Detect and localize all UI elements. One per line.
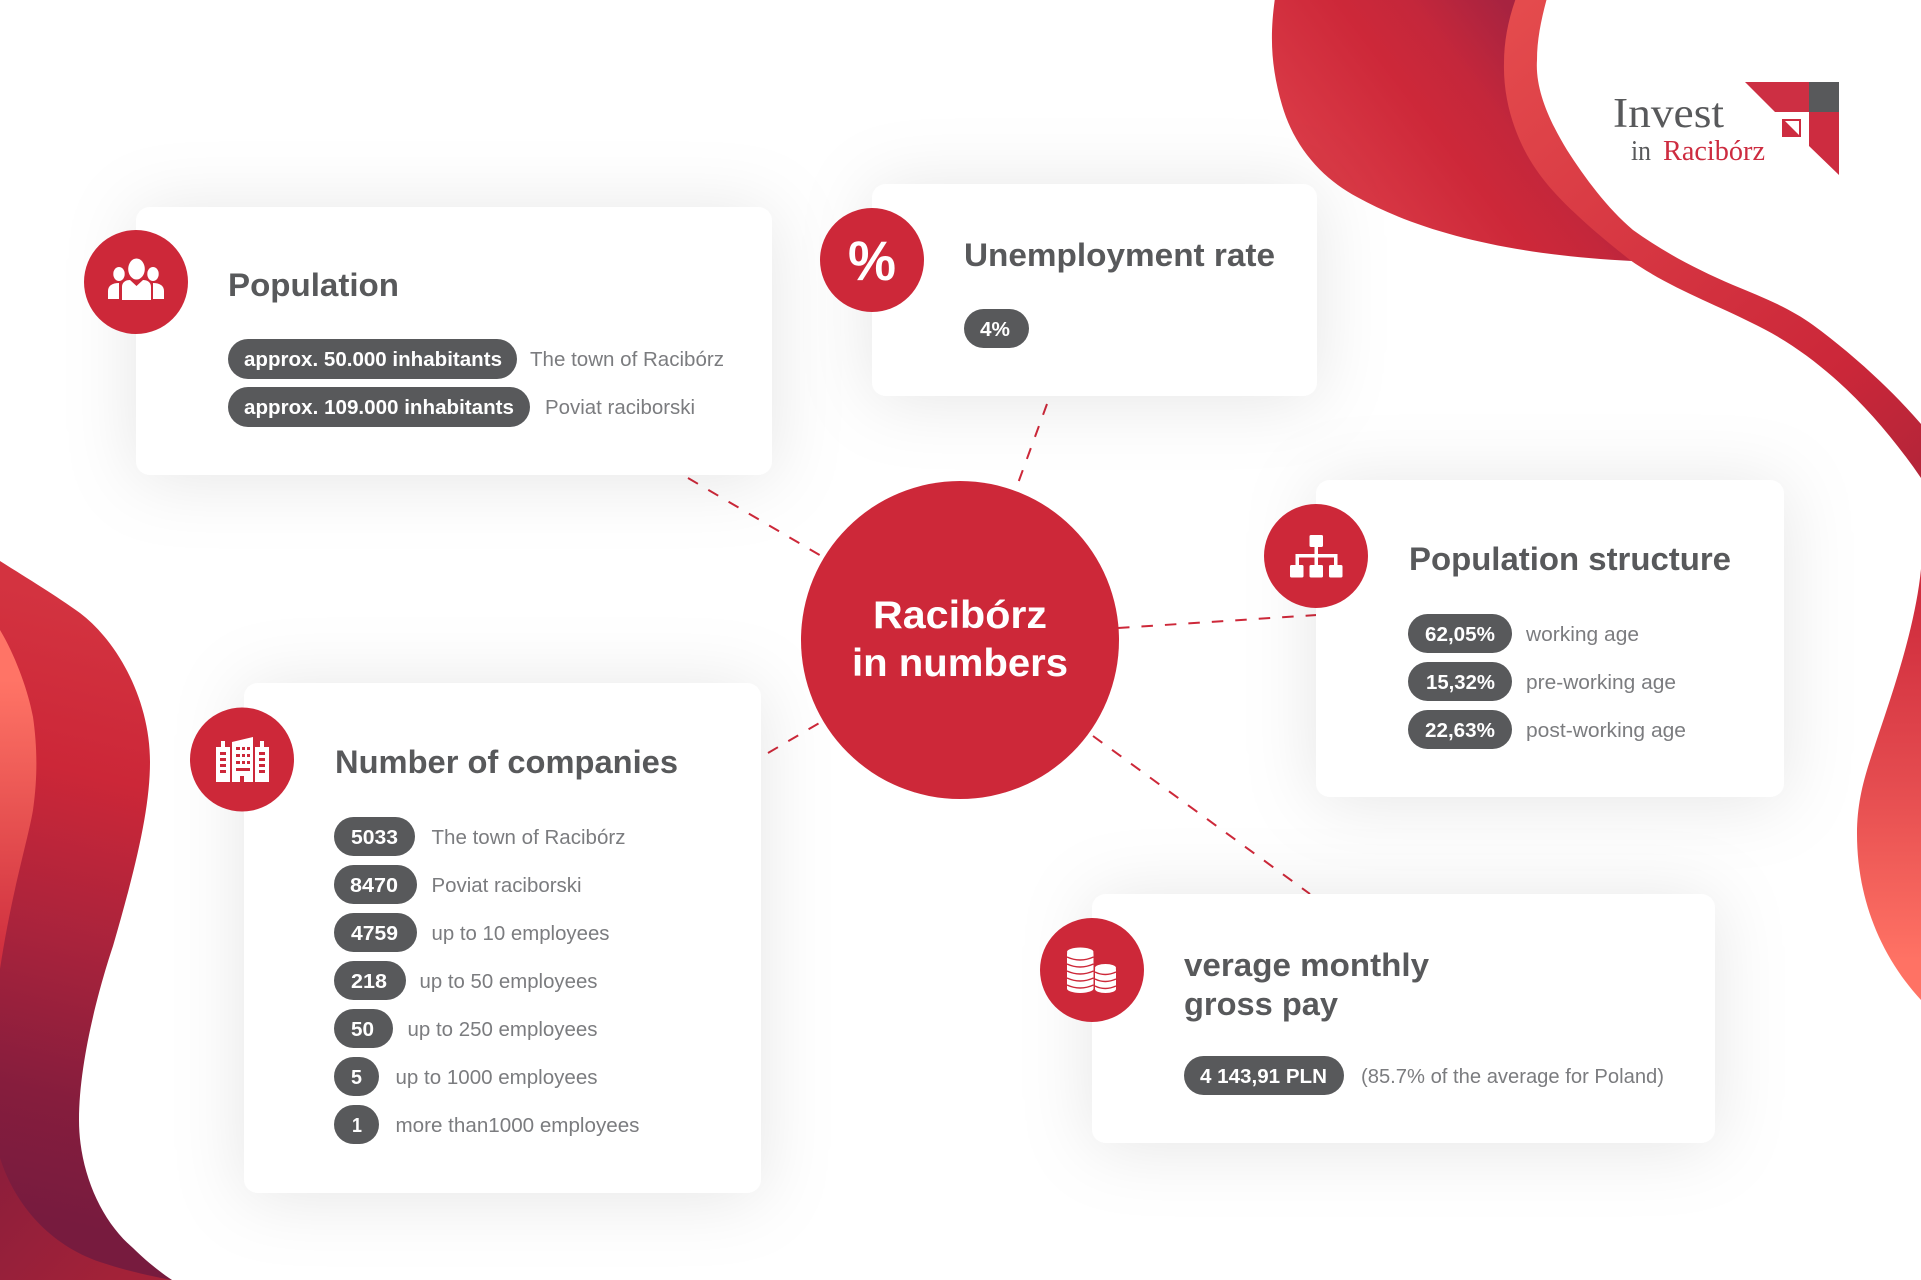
stat row: up to 250 (334, 1009, 598, 1048)
stat row: poviat: 8470 (350, 875, 398, 897)
central circle: Racibórz in numbers: Racibórz (873, 594, 1047, 637)
stat row: poviat: approx. 109.000 inhabitants (244, 397, 514, 419)
stat row: up to 1000: up to 1000 employees (396, 1067, 598, 1089)
stat row: town (334, 817, 626, 856)
panel: population (84, 207, 772, 475)
stat row: town: 5033 (351, 827, 398, 849)
icon: coins (1040, 918, 1144, 1022)
stat row: more than 1000: more than1000 employees (396, 1115, 640, 1137)
stat row: up to 10: up to 10 employees (432, 923, 610, 945)
card (1316, 480, 1784, 797)
stat row: up to 1000: 5 (351, 1067, 362, 1089)
stat row: poviat: Poviat raciborski (432, 875, 582, 897)
card (244, 683, 761, 1193)
stat row: pay (1184, 1056, 1664, 1095)
heading: Number of companies (335, 744, 678, 780)
stat row: town (228, 339, 724, 379)
stat row: up to 50: up to 50 employees (420, 971, 598, 993)
panel: unemployment rate (820, 184, 1317, 396)
stat row: poviat (334, 865, 582, 904)
heading: gross pay (1184, 986, 1338, 1022)
stat row: working age (1408, 614, 1639, 653)
card (872, 184, 1317, 396)
panel: number of companies (190, 683, 761, 1193)
background wave: top right (1272, 0, 1921, 478)
stat row: up to 10 (334, 913, 610, 952)
heading: Unemployment rate (964, 237, 1275, 273)
stat row: town: The town of Racibórz (530, 349, 724, 371)
logo: Invest in Racibórz: in (1631, 135, 1651, 167)
icon: people (84, 230, 188, 334)
icon: percent: % (848, 229, 896, 292)
panel: average monthly gross pay (1040, 894, 1715, 1143)
stat row: more than 1000: 1 (352, 1115, 362, 1137)
stat: 4% (964, 309, 1029, 348)
stat row: more than 1000 (334, 1105, 640, 1144)
stat row: up to 250: 50 (351, 1019, 374, 1041)
heading (1184, 947, 1429, 1022)
stat row: poviat: Poviat raciborski (545, 397, 695, 419)
icon: percent (820, 208, 924, 312)
dashed connector lines (688, 404, 1317, 894)
stat row: up to 50: 218 (351, 971, 387, 993)
stat row: post-working age: 22,63% (1425, 720, 1495, 742)
stat row: up to 250: up to 250 employees (408, 1019, 598, 1041)
logo: Invest in Racibórz: Invest (1613, 91, 1724, 137)
icon: org chart (1264, 504, 1368, 608)
stat: 4%: 4% (980, 319, 1010, 341)
stat row: pay: (85.7% of the average for Poland) (1361, 1066, 1664, 1088)
stat row: pre-working age: 15,32% (1426, 672, 1495, 694)
stat row: post-working age: post-working age (1526, 720, 1686, 742)
card (1092, 894, 1715, 1143)
stat row: town: The town of Racibórz (432, 827, 626, 849)
stat row: pre-working age (1408, 662, 1676, 701)
heading: Population structure (1409, 541, 1731, 577)
stat row: town: approx. 50.000 inhabitants (244, 349, 502, 371)
stat row: pay: 4 143,91 PLN (1200, 1066, 1327, 1088)
stat row: working age: 62,05% (1425, 624, 1495, 646)
heading: Population (228, 267, 399, 303)
stat row: up to 1000 (334, 1057, 598, 1096)
stat row: pre-working age: pre-working age (1526, 672, 1676, 694)
card (136, 207, 772, 475)
background wave: right (1857, 569, 1921, 1000)
background wave: left (0, 561, 172, 1280)
stat row: working age: working age (1525, 624, 1639, 646)
central circle: Racibórz in numbers: in numbers (852, 642, 1068, 685)
central circle: Racibórz in numbers (801, 481, 1119, 799)
stat row: up to 50 (334, 961, 598, 1000)
icon: office buildings (190, 708, 294, 812)
logo: Invest in Racibórz (1613, 82, 1839, 175)
panel: population structure (1264, 480, 1784, 797)
stat row: post-working age (1408, 710, 1686, 749)
stat row: up to 10: 4759 (351, 923, 398, 945)
heading: verage monthly (1184, 947, 1429, 983)
logo: Invest in Racibórz: Racibórz (1663, 135, 1765, 167)
stat row: poviat (228, 387, 695, 427)
